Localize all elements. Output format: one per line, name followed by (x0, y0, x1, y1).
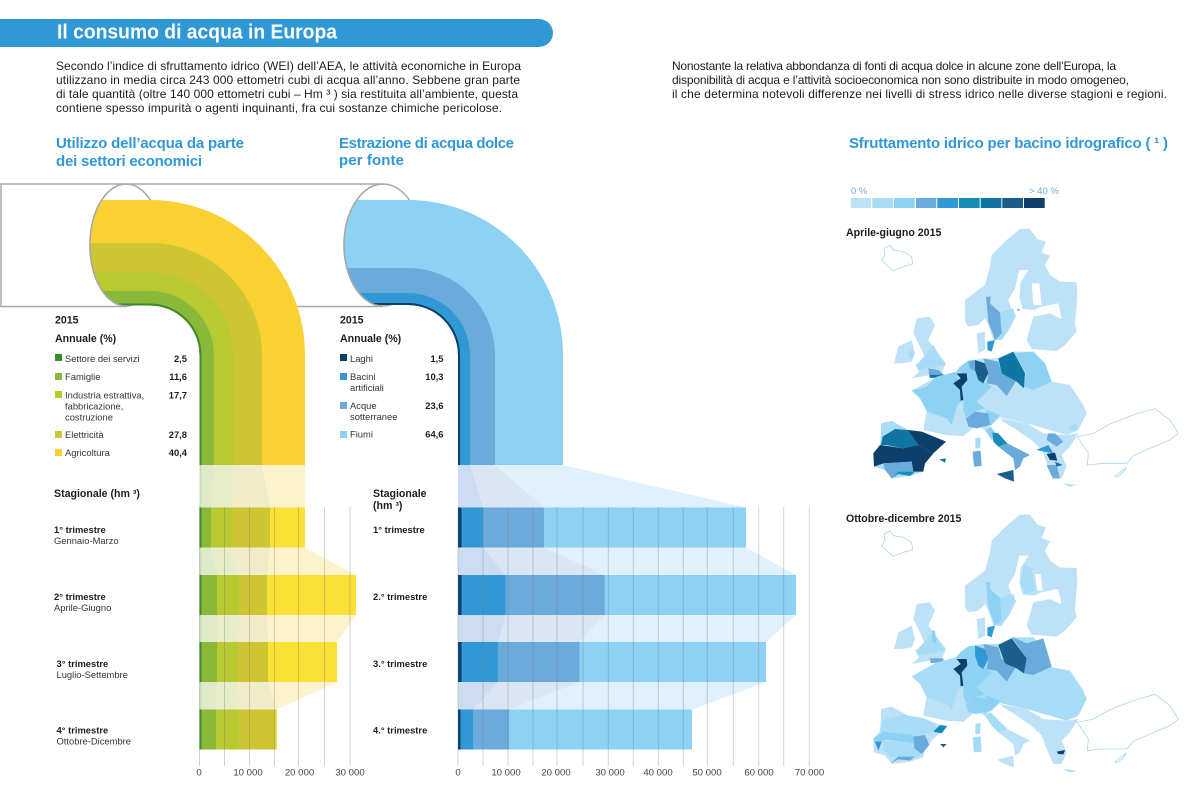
axis: sources (455, 507, 824, 778)
flow bands: sectors (200, 465, 356, 710)
axis: sectors: 30 000 (335, 768, 365, 778)
legend: sources: 64,6 (425, 428, 444, 440)
heading: abstraction by source: per fonte (339, 152, 404, 169)
legend: sectors: Famiglie (65, 371, 100, 382)
heading: abstraction by source (339, 135, 514, 169)
axis: sectors: 20 000 (285, 768, 314, 778)
axis: sectors: 0 (196, 768, 202, 778)
intro text right: Nonostante la relativa abbondanza di fonti di acqua dolce in alcune zone dell’Europa, la (672, 59, 1116, 73)
legend: sources: 10,3 (425, 371, 444, 382)
heading: water use by sector: dei settori economici (56, 153, 202, 170)
legend: sectors: costruzione (65, 412, 113, 422)
bar chart: sectors by quarter (200, 508, 356, 750)
seasonal labels: sources (373, 488, 427, 736)
seasonal labels: sources: 2.° trimestre (373, 591, 427, 602)
heading: water exploitation by basin: Sfruttamento idrico per bacino idrografico ( ¹ ) (849, 135, 1168, 152)
bar chart: sources by quarter (458, 508, 796, 750)
map label: October-December: Ottobre-dicembre 2015 (846, 513, 962, 525)
intro text right: il che determina notevoli differenze nei livelli di stress idrico nelle diverse stagioni e regioni. (672, 87, 1167, 101)
legend: sectors: 11,6 (169, 371, 187, 382)
flow bands: sources (458, 465, 796, 710)
seasonal labels: sources: 3.° trimestre (373, 658, 427, 669)
seasonal labels: sources: Stagionale (373, 488, 427, 500)
heading: water use by sector (56, 135, 244, 170)
axis: sources: 50 000 (692, 768, 722, 778)
seasonal labels: sectors: Ottobre-Dicembre (56, 736, 131, 746)
intro text right (672, 59, 1167, 101)
legend: sources: 1,5 (430, 353, 444, 364)
legend: sources: artificiali (350, 382, 384, 393)
seasonal labels: sectors: Stagionale (hm ³) (54, 488, 140, 500)
seasonal labels: sectors: 3° trimestre (56, 658, 108, 669)
map colour legend (851, 186, 1059, 208)
legend: sources: Fiumi (350, 428, 373, 440)
legend: sectors: Annuale (%) (55, 333, 116, 345)
seasonal labels: sectors: 2° trimestre (54, 591, 106, 602)
seasonal labels: sectors: Gennaio-Marzo (54, 535, 119, 546)
legend: sectors: Industria estrattiva, (65, 390, 144, 400)
legend: sources: Bacini (350, 371, 376, 382)
axis: sources: 30 000 (595, 768, 625, 778)
legend: sectors: 40,4 (169, 447, 188, 458)
legend: sectors: 27,8 (169, 429, 187, 440)
axis: sources: 10 000 (491, 768, 521, 778)
pipe: sources (330, 200, 563, 465)
intro text right: disponibilità di acqua e l’attività socioeconomica non sono distribuite in modo omogeneo, (672, 73, 1129, 87)
axis: sources: 70 000 (795, 768, 824, 778)
seasonal labels: sectors: Luglio-Settembre (56, 669, 128, 680)
legend: sectors: Agricoltura (65, 447, 111, 458)
intro text left: contiene spesso impurità o agenti inquinanti, fra cui sostanze chimiche pericolose. (56, 101, 502, 115)
legend: sources: Acque (350, 400, 377, 411)
pipe: sectors (80, 200, 305, 465)
seasonal labels: sectors: 1° trimestre (54, 524, 106, 535)
legend: sectors (55, 314, 188, 458)
legend: sources: 23,6 (425, 400, 444, 411)
axis: sources: 0 (455, 768, 461, 778)
seasonal labels: sectors (54, 488, 140, 746)
legend: sectors: 17,7 (169, 390, 187, 400)
map colour legend: 0 % (851, 186, 868, 197)
seasonal labels: sectors: Aprile-Giugno (54, 602, 111, 613)
legend: sources (340, 314, 444, 440)
title banner: Il consumo di acqua in Europa (57, 22, 338, 44)
legend: sources: Laghi (350, 353, 373, 364)
map label: April-June: Aprile-giugno 2015 (846, 227, 941, 239)
legend: sectors: Elettricità (65, 429, 104, 440)
map colour legend: > 40 % (1029, 186, 1059, 197)
map: October-December 2015 (873, 515, 1178, 772)
seasonal labels: sources: 1° trimestre (373, 524, 425, 535)
seasonal labels: sources: (hm ³) (373, 500, 402, 512)
axis: sources: 40 000 (643, 768, 673, 778)
legend: sectors: Settore dei servizi (65, 353, 140, 364)
legend: sectors: fabbricazione, (65, 400, 123, 412)
legend: sectors: 2015 (55, 314, 79, 326)
legend: sectors: 2,5 (174, 353, 187, 364)
axis: sectors (196, 507, 365, 778)
intro text left: di tale quantità (oltre 140 000 ettometri cubi – Hm ³ ) sia restituita all’ambiente, questa (56, 87, 518, 101)
seasonal labels: sectors: 4° trimestre (56, 724, 108, 736)
heading: water use by sector: Utilizzo dell’acqua da parte (56, 135, 244, 152)
axis: sources: 20 000 (541, 768, 571, 778)
intro text left: utilizzano in media circa 243 000 ettometri cubi di acqua all’anno. Sebbene gran parte (56, 73, 520, 87)
intro text left (56, 59, 521, 115)
legend: sources: Annuale (%) (340, 333, 401, 345)
intro text left: Secondo l’indice di sfruttamento idrico (WEI) dell’AEA, le attività economiche in Europa (56, 59, 521, 73)
legend: sources: sotterranee (350, 411, 397, 422)
heading: abstraction by source: Estrazione di acqua dolce (339, 135, 514, 152)
map: April-June 2015 (873, 229, 1178, 487)
pipe outline frame (1, 184, 422, 306)
axis: sectors: 10 000 (233, 768, 263, 778)
legend: sources: 2015 (340, 314, 364, 326)
title banner (0, 19, 553, 47)
seasonal labels: sources: 4.° trimestre (373, 724, 427, 736)
axis: sources: 60 000 (744, 768, 774, 778)
